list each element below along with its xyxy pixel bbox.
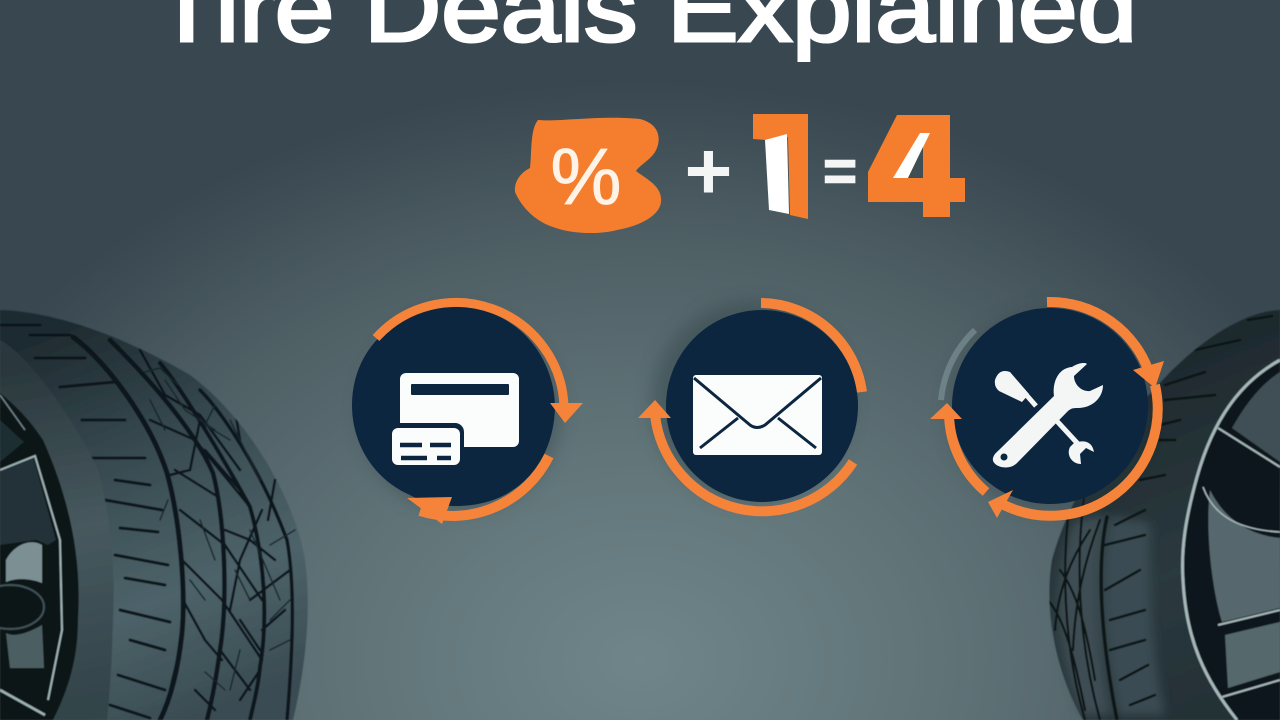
soft shadow (360, 312, 560, 512)
navy circle (952, 308, 1148, 504)
tread grooves (1048, 316, 1272, 720)
orange cycle arrow top (1047, 302, 1164, 388)
orange blob with percent sign: % (550, 132, 622, 221)
equals sign: = (823, 139, 857, 204)
orange cycle arrow right and bottom (988, 385, 1158, 518)
tire tread body (0, 310, 308, 720)
icon: tools in circular arrows (930, 302, 1164, 518)
soft shadow (652, 302, 852, 502)
plus sign: + (685, 126, 732, 217)
number 1: 1 (770, 164, 786, 197)
orange cycle arrow top (376, 302, 583, 423)
navy circle (666, 310, 858, 502)
orange cycle arrow bottom (638, 400, 853, 511)
orange cycle arrow left (930, 403, 986, 492)
number 4 (868, 110, 965, 222)
tread surface highlight (1059, 515, 1112, 715)
large wrench (993, 363, 1103, 467)
envelope icon (693, 375, 822, 455)
icon: envelope in circular arrows (638, 302, 862, 511)
shoulder highlight (1103, 517, 1165, 715)
tire sidewall (0, 340, 114, 720)
tread grooves (0, 325, 295, 720)
wheel rim (0, 393, 79, 720)
icon: payment card in circular arrows (352, 302, 583, 524)
equation: 3 + 1 = 4 (515, 110, 965, 233)
tire body (1049, 310, 1280, 720)
grey arc remnant (941, 330, 975, 400)
soft shadow (948, 310, 1148, 510)
orange cycle arrow top (761, 303, 862, 392)
orange blob with percent sign (515, 118, 661, 233)
right tire (1048, 310, 1280, 720)
navy circle (352, 307, 555, 506)
tools icon (993, 363, 1103, 467)
number 4: 4 (890, 110, 946, 222)
number 1 (753, 114, 808, 219)
wheel rim with spokes (1183, 360, 1280, 720)
credit card icon (387, 373, 519, 470)
orange cycle arrow bottom (407, 456, 549, 524)
left tire (0, 310, 308, 720)
screwdriver shaft and small wrench (1022, 390, 1079, 445)
wrench hole (1000, 454, 1008, 460)
